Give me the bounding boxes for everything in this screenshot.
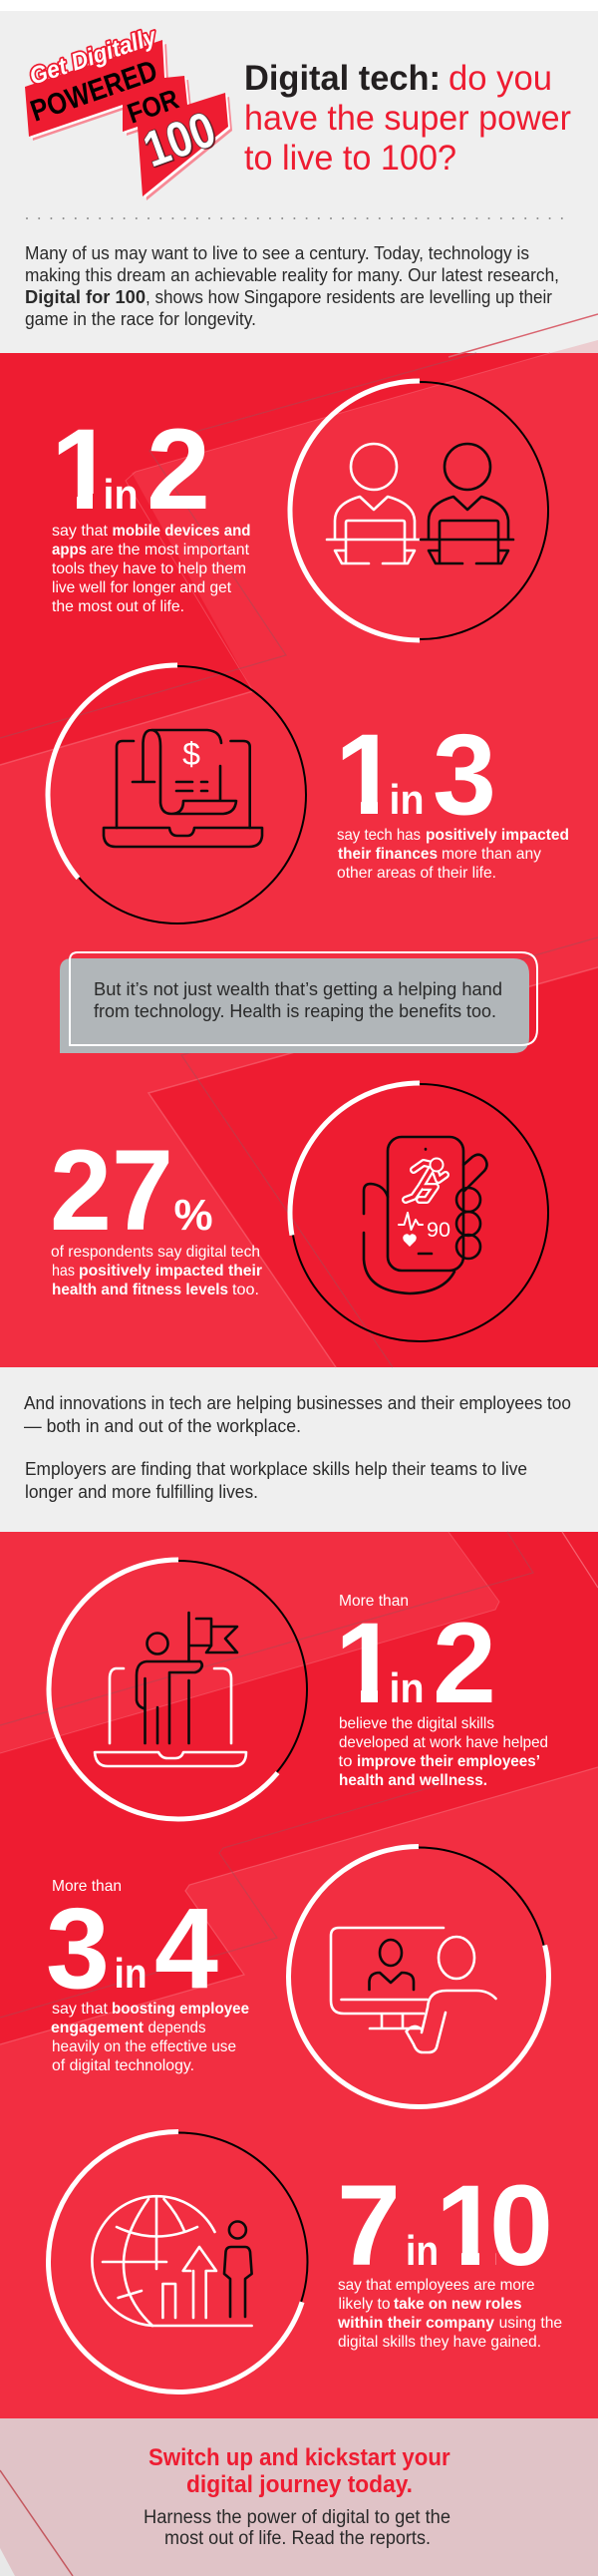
stat: 1 in 2 mobile devices: are the most important bbox=[91, 542, 250, 558]
badge: Get Digitally Powered for 100: FOR bbox=[124, 83, 182, 130]
stat: more than 1 in 2 health and wellness: believe the digital skills bbox=[339, 1715, 494, 1732]
stat: 27% health and fitness: too. bbox=[232, 1282, 259, 1298]
title: Digital tech: bbox=[244, 59, 441, 98]
stat: more than 3 in 4 employee engagement: of digital technology. bbox=[52, 2057, 194, 2074]
circle icon: two people at laptops bbox=[290, 381, 549, 640]
call to action: Harness the power of digital to get the bbox=[144, 2507, 450, 2528]
call to action: digital journey today. bbox=[186, 2471, 413, 2498]
stat: 7 in 10 new roles: using the bbox=[499, 2315, 562, 2332]
stat: 27% health and fitness: has bbox=[52, 1263, 75, 1280]
title: do you bbox=[448, 59, 552, 98]
stat: 7 in 10 new roles: digital skills they have gained. bbox=[338, 2334, 541, 2351]
stat: more than 3 in 4 employee engagement: 3 bbox=[46, 1885, 110, 2013]
stat: more than 3 in 4 employee engagement: say that bbox=[52, 2001, 109, 2018]
stat: 1 in 2 mobile devices: 2 bbox=[147, 406, 210, 534]
stat: 7 in 10 new roles: 1 bbox=[436, 2162, 499, 2290]
stat: more than 3 in 4 employee engagement: depends bbox=[148, 2020, 205, 2036]
stat: 1 in 3 finances: their finances bbox=[338, 846, 438, 863]
stat: more than 3 in 4 employee engagement bbox=[46, 1878, 249, 2074]
stat: 1 in 3 finances: say tech has bbox=[337, 827, 421, 844]
stat: more than 3 in 4 employee engagement: boosting employee bbox=[112, 2001, 249, 2018]
intro text: game in the race for longevity. bbox=[25, 309, 256, 329]
stat: 1 in 2 mobile devices: tools they have to help them bbox=[52, 560, 246, 577]
stat: more than 1 in 2 health and wellness: in bbox=[389, 1664, 425, 1711]
call to action: most out of life. Read the reports. bbox=[164, 2528, 431, 2549]
stat: more than 1 in 2 health and wellness: 1 bbox=[335, 1600, 399, 1727]
stat: more than 3 in 4 employee engagement: More than bbox=[52, 1878, 122, 1895]
intro text: Many of us may want to live to see a century. Today, technology is bbox=[25, 243, 529, 263]
stat: 27% health and fitness bbox=[50, 1127, 262, 1298]
stat: 1 in 3 finances: positively impacted bbox=[426, 827, 569, 844]
stat: more than 3 in 4 employee engagement: engagement bbox=[51, 2020, 145, 2036]
stat: 1 in 2 mobile devices: live well for longer and get bbox=[52, 579, 232, 596]
stat: 7 in 10 new roles: 7 bbox=[337, 2162, 401, 2290]
intro text: making this dream an achievable reality for many. Our latest research, bbox=[25, 265, 559, 285]
badge: Get Digitally Powered for 100: 100 bbox=[137, 101, 222, 178]
stat: 27% health and fitness: % bbox=[173, 1191, 213, 1240]
stat: 7 in 10 new roles: likely to bbox=[339, 2296, 391, 2313]
section text: businesses and employees bbox=[24, 1393, 571, 1502]
stat: more than 1 in 2 health and wellness bbox=[335, 1593, 548, 1789]
stat: 1 in 2 mobile devices: apps bbox=[52, 542, 87, 558]
stat: 1 in 3 finances: other areas of their life. bbox=[337, 865, 496, 882]
intro text: , shows how Singapore residents are levelling up their bbox=[146, 287, 552, 307]
stat: 1 in 2 mobile devices: 1 bbox=[51, 406, 115, 534]
stat: 7 in 10 new roles: within their company bbox=[337, 2315, 494, 2332]
intro text bbox=[25, 243, 559, 329]
stat: more than 1 in 2 health and wellness: 2 bbox=[433, 1600, 496, 1727]
circle icon: laptop with receipt: $ bbox=[182, 736, 200, 772]
stat: more than 1 in 2 health and wellness: to bbox=[339, 1753, 353, 1770]
stat: 1 in 3 finances: in bbox=[389, 776, 425, 823]
stat: more than 3 in 4 employee engagement: in bbox=[114, 1950, 148, 1997]
stat: more than 1 in 2 health and wellness: health and wellness. bbox=[339, 1772, 487, 1789]
stat: more than 3 in 4 employee engagement: 4 bbox=[154, 1885, 218, 2013]
circle icon: globe, growth arrow and person bbox=[15, 2098, 342, 2425]
intro text: Digital for 100 bbox=[25, 287, 146, 307]
stat: 27% health and fitness: 27 bbox=[50, 1127, 173, 1255]
section text: businesses and employees: longer and more fulfilling lives. bbox=[25, 1482, 258, 1502]
title bbox=[244, 59, 571, 178]
stat: 7 in 10 new roles: take on new roles bbox=[394, 2296, 522, 2313]
stat: 27% health and fitness: of respondents say digital tech bbox=[51, 1244, 260, 1261]
callout: health: But it’s not just wealth that’s getting a helping hand bbox=[94, 978, 502, 999]
badge: Get Digitally Powered for 100: Get Digitally bbox=[26, 23, 161, 91]
circle icon: hand holding phone bbox=[269, 1062, 570, 1363]
section text: businesses and employees: — both in and out of the workplace. bbox=[24, 1416, 301, 1436]
circle icon: person with flag on laptop bbox=[0, 1507, 361, 1872]
callout: health: from technology. Health is reaping the benefits too. bbox=[94, 1000, 496, 1021]
stat: 7 in 10 new roles: say that employees are more bbox=[338, 2277, 535, 2294]
stat: 1 in 2 mobile devices bbox=[52, 429, 249, 611]
stat: 1 in 2 mobile devices: mobile devices and bbox=[112, 523, 251, 540]
stat: 27% health and fitness: health and fitness levels bbox=[52, 1282, 228, 1298]
call to action: Switch up and kickstart your bbox=[149, 2444, 450, 2471]
title: have the super power bbox=[244, 99, 571, 138]
circle icon: hand holding phone: 90 bbox=[427, 1219, 450, 1242]
stat: 1 in 2 mobile devices: in bbox=[104, 471, 138, 518]
stat: 27% health and fitness: positively impacted their bbox=[79, 1263, 262, 1280]
stat: 1 in 2 mobile devices: the most out of life. bbox=[52, 598, 184, 615]
stat: more than 3 in 4 employee engagement: heavily on the effective use bbox=[52, 2038, 236, 2055]
badge: Get Digitally Powered for 100 bbox=[25, 23, 232, 200]
call to action bbox=[144, 2444, 450, 2549]
title: to live to 100? bbox=[244, 139, 456, 178]
section text: businesses and employees: And innovations in tech are helping businesses and their employees too bbox=[24, 1393, 571, 1413]
stat: 1 in 3 finances bbox=[337, 734, 568, 878]
stat: 1 in 3 finances: 1 bbox=[335, 711, 399, 839]
stat: more than 1 in 2 health and wellness: improve their employees’ bbox=[357, 1753, 540, 1770]
stat: 1 in 2 mobile devices: say that bbox=[52, 523, 109, 540]
stat: 7 in 10 new roles: 0 bbox=[489, 2162, 553, 2290]
circle icon: laptop with receipt bbox=[0, 612, 360, 977]
stat: more than 1 in 2 health and wellness: developed at work have helped bbox=[339, 1734, 548, 1751]
callout: health bbox=[60, 952, 537, 1053]
circle icon: video call monitor bbox=[261, 1819, 576, 2134]
section text: businesses and employees: Employers are finding that workplace skills help their teams to live bbox=[25, 1459, 527, 1479]
badge: Get Digitally Powered for 100: POWERED bbox=[27, 54, 161, 129]
stat: 1 in 3 finances: more than any bbox=[442, 846, 541, 863]
stat: 1 in 3 finances: 3 bbox=[433, 711, 496, 839]
stat: 7 in 10 new roles: in bbox=[406, 2227, 439, 2274]
stat: more than 1 in 2 health and wellness: More than bbox=[339, 1593, 409, 1610]
stat: 7 in 10 new roles bbox=[338, 2184, 562, 2350]
